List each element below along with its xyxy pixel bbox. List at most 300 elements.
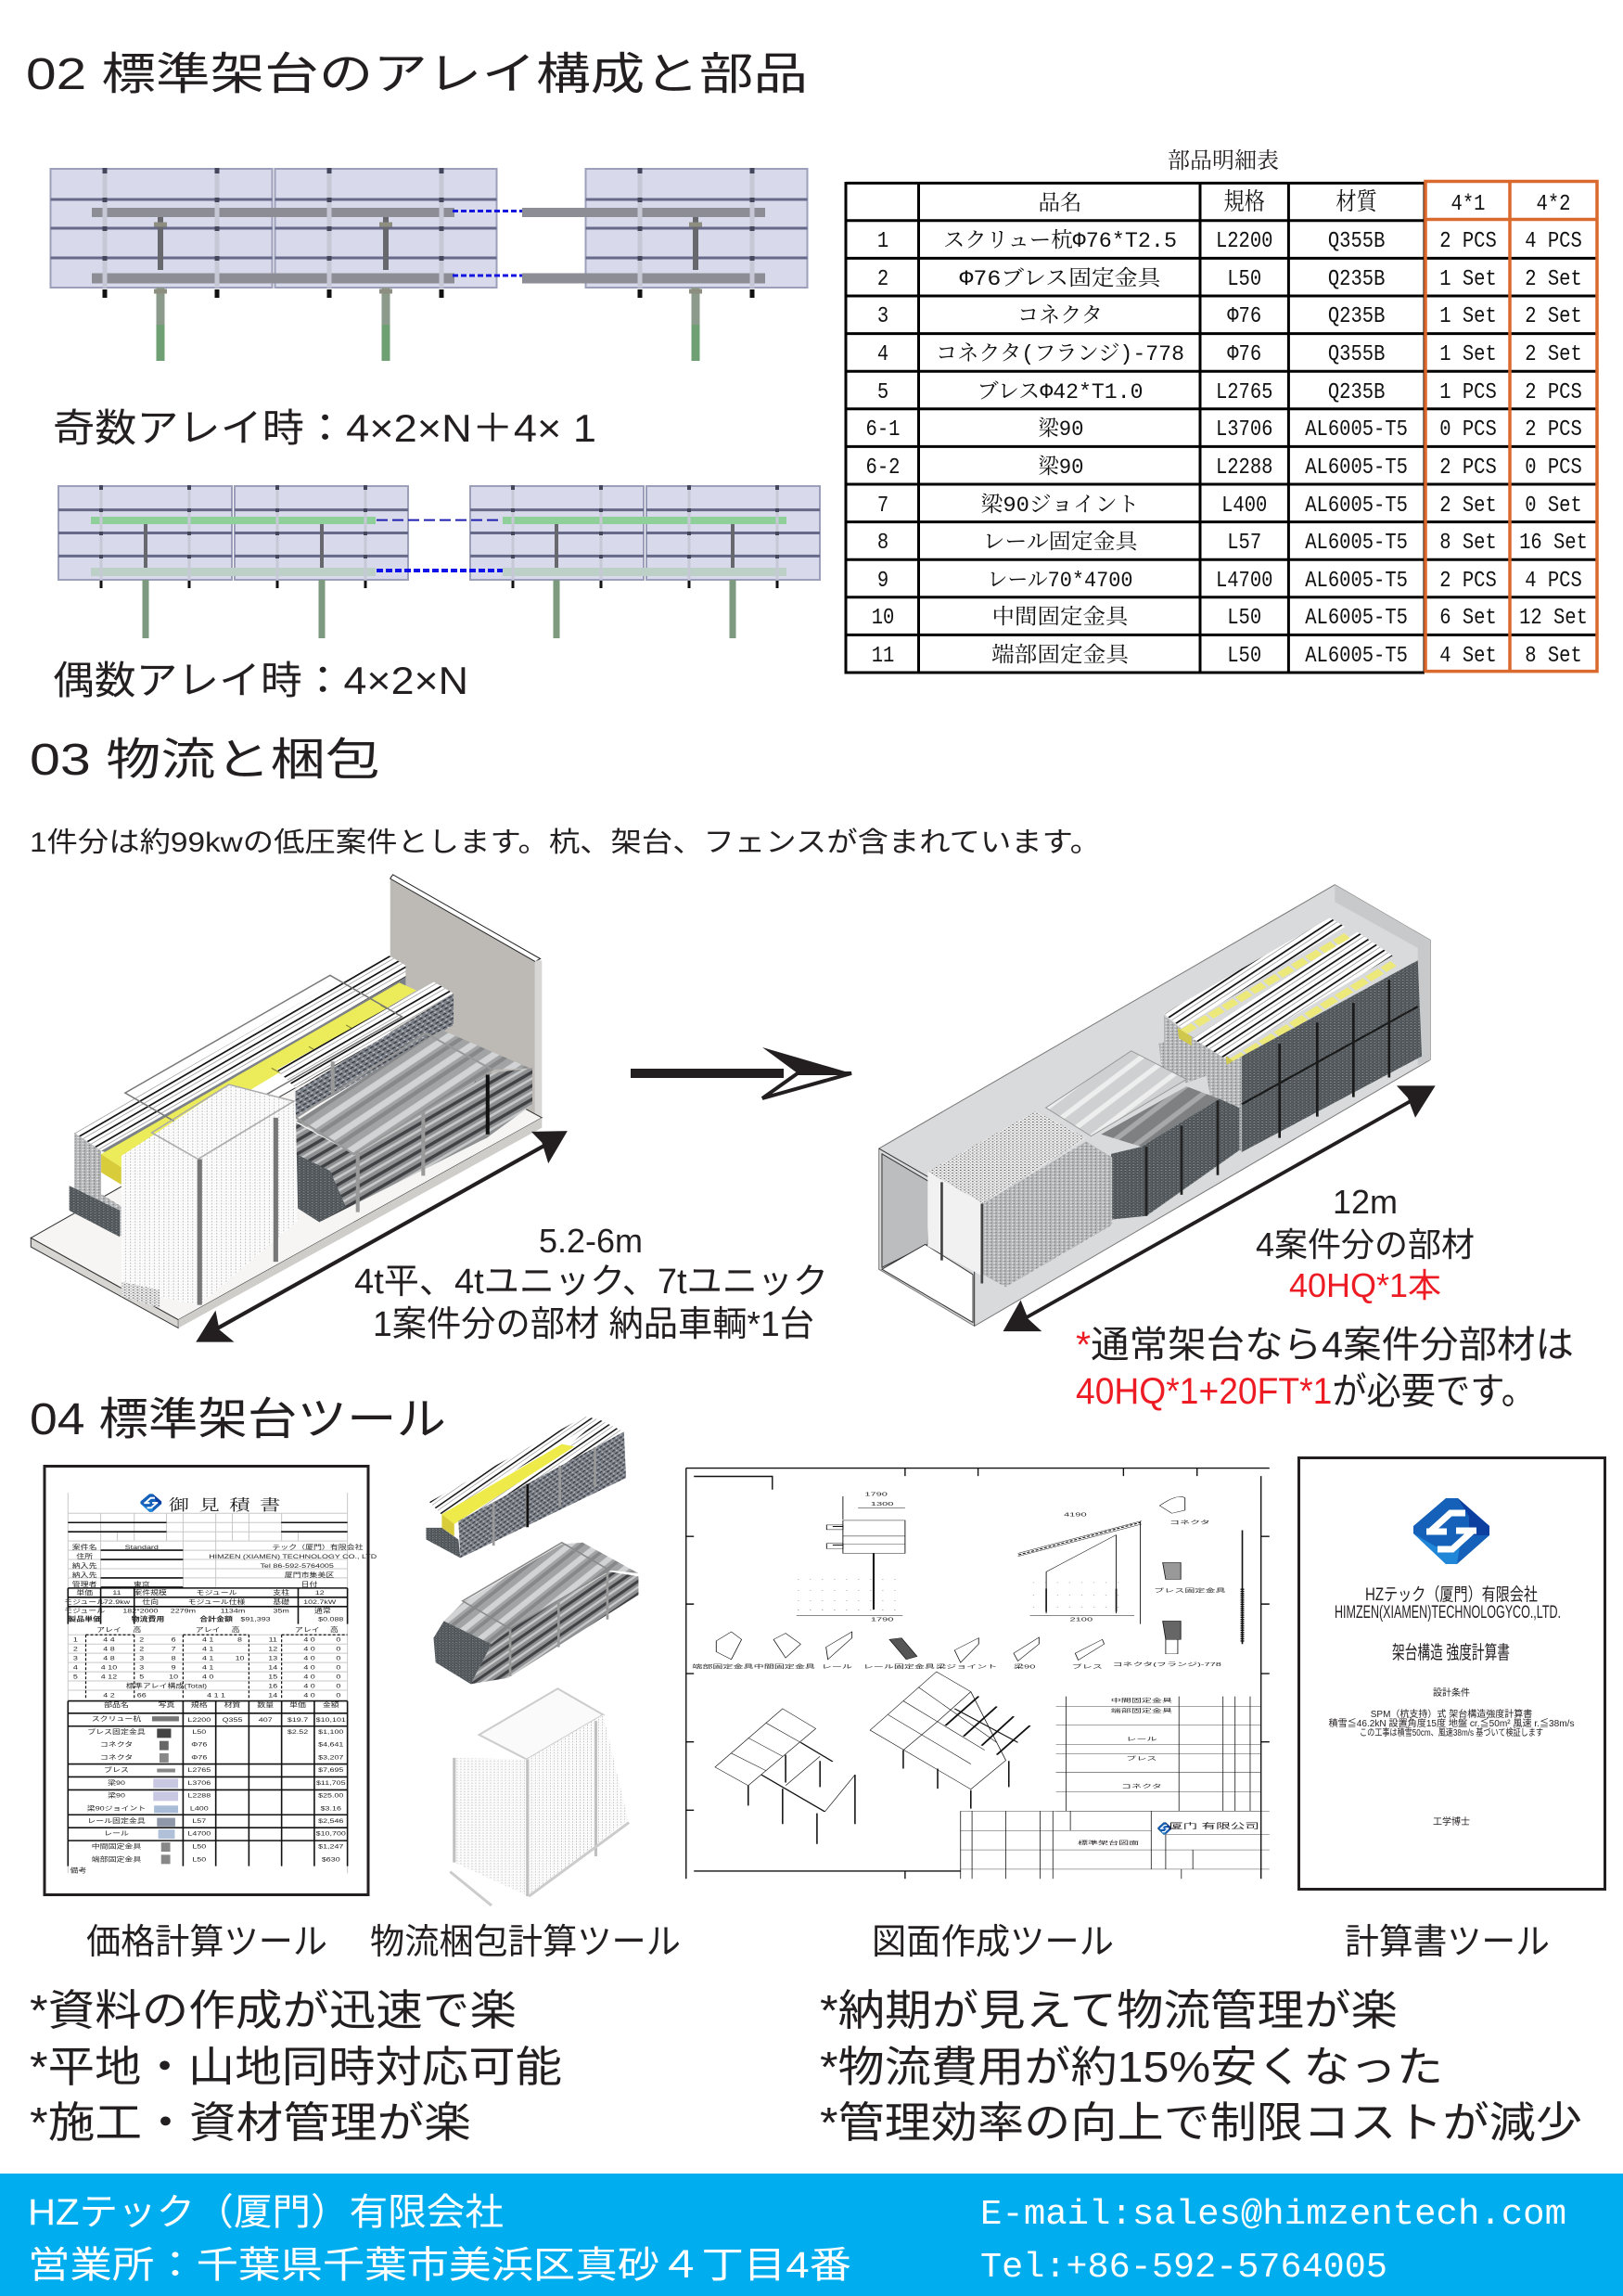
column: 4*1: 2 PCS xyxy=(1439,568,1497,594)
column: 4*2 xyxy=(1519,191,1588,669)
quote text: Φ76 xyxy=(191,1754,208,1761)
part labels: 端部固定金具 xyxy=(692,1663,754,1670)
column: 4*2: 8 Set xyxy=(1525,643,1582,669)
quote text: 4 10 xyxy=(101,1664,118,1671)
report title: 架台構造 強度計算書 xyxy=(1392,1642,1510,1663)
benefits: left: *資料の作成が迅速で楽 xyxy=(30,1986,517,2034)
footer band xyxy=(0,2174,1623,2296)
column: spec xyxy=(1216,188,1272,669)
column: material: Q235B xyxy=(1328,303,1385,329)
column: 4*1: 4 Set xyxy=(1439,643,1497,669)
column: name: Φ76ブレス固定金具 xyxy=(959,266,1162,291)
column: material: Q235B xyxy=(1328,266,1385,292)
column: 4*1: 1 Set xyxy=(1439,266,1497,292)
quote text: L50 xyxy=(192,1843,207,1850)
quote text: 標準アレイ構成(Total) xyxy=(126,1682,208,1689)
column: name: コネクタ xyxy=(1017,304,1103,328)
quote text: 備考 xyxy=(70,1866,87,1874)
column: material: AL6005-T5 xyxy=(1305,643,1408,669)
quote text: 端部固定金具 xyxy=(92,1855,141,1863)
quote text: 厦門市集美区 xyxy=(285,1571,334,1579)
column: name: コネクタ(フランジ)-778 xyxy=(936,342,1184,366)
column: number: 11 xyxy=(872,643,894,669)
title block xyxy=(961,1811,1270,1879)
truck bed and wall xyxy=(31,875,542,1328)
column: name: 梁90 xyxy=(1039,417,1083,442)
column: 4*1 xyxy=(1439,191,1497,669)
column: number: 9 xyxy=(877,568,888,594)
benefits: right: *物流費用が約15%安くなった xyxy=(820,2043,1443,2091)
quote text: 4 0 xyxy=(303,1655,315,1661)
column: 4*2: 2 PCS xyxy=(1525,417,1582,443)
quote text: $91,393 xyxy=(240,1616,271,1623)
illustration: container load xyxy=(879,885,1436,1331)
column: name: 梁90 xyxy=(1039,455,1083,480)
column: 4*2: 2 Set xyxy=(1525,341,1582,367)
report details: 積雪≦46.2kN 設置角度15度 地盤 cr.≦50m² 風速 r.≦38m/s xyxy=(1328,1717,1575,1729)
document: calculation report xyxy=(1298,1458,1604,1889)
piles xyxy=(146,524,733,638)
quote text: 2279m xyxy=(171,1607,197,1614)
quote text: 11 xyxy=(269,1636,277,1643)
report details: SPM（杭支持）式 架台構造強度計算書 xyxy=(1371,1708,1532,1720)
quote text: 合計金額 xyxy=(199,1615,233,1623)
quote text: 0 xyxy=(336,1682,341,1689)
document: drawing sheet xyxy=(686,1469,1270,1879)
column: 4*1: 1 Set xyxy=(1439,303,1497,329)
part labels: 梁ジョイント xyxy=(936,1663,997,1670)
quote text: 0 xyxy=(336,1673,341,1680)
part labels: ブレス固定金具 xyxy=(1154,1587,1226,1594)
quote text: L4700 xyxy=(187,1830,211,1837)
column: material xyxy=(1305,188,1408,669)
column: spec: L50 xyxy=(1227,266,1261,292)
quote text: 仕向 xyxy=(142,1597,159,1606)
quote text: 3 xyxy=(139,1655,145,1661)
column: name: スクリュー杭Φ76*T2.5 xyxy=(943,228,1177,253)
column: name: ブレスΦ42*T1.0 xyxy=(978,380,1143,404)
container caption: 4案件分の部材 xyxy=(1256,1225,1475,1263)
side elevation view: 4190 xyxy=(1064,1511,1087,1518)
column: 4*1: 2 PCS xyxy=(1439,455,1497,481)
column: spec: L50 xyxy=(1227,605,1261,631)
quote text: 納入先 xyxy=(72,1561,97,1570)
bill of materials block: ブレス xyxy=(1126,1755,1157,1762)
quote text: 4 xyxy=(73,1664,79,1671)
quote text: 4 1 xyxy=(202,1636,213,1643)
quote text: モジュール仕様 xyxy=(188,1597,246,1606)
arrow: length xyxy=(196,1131,568,1342)
quote text: 13 xyxy=(268,1655,278,1661)
label: odd array formula: 奇数アレイ時：4×2×N＋4× 1 xyxy=(53,406,596,450)
quote text: 梁90 xyxy=(108,1779,126,1786)
column: number: 6-1 xyxy=(866,417,900,443)
part labels: コネクタ(フランジ)-778 xyxy=(1113,1661,1221,1667)
quote grid xyxy=(68,1493,348,1873)
side elevation view: 2100 xyxy=(1070,1616,1093,1623)
mesh bundle xyxy=(121,1084,298,1308)
quote text: 4 0 xyxy=(303,1691,315,1699)
quote text: 案件規模 xyxy=(134,1588,167,1597)
report details: 設計条件 xyxy=(1433,1687,1470,1699)
quote header: 御見積書 xyxy=(169,1493,280,1515)
benefits: right: *管理効率の向上で制限コストが減少 xyxy=(820,2098,1582,2147)
pack: piles xyxy=(433,1543,638,1684)
quote text: 14 xyxy=(268,1664,278,1671)
quote text: 0 xyxy=(336,1646,341,1652)
column: number: 10 xyxy=(872,605,894,631)
quote text: L400 xyxy=(190,1804,209,1812)
column: number: 2 xyxy=(877,266,888,292)
parts table xyxy=(846,182,1597,673)
sheet frame xyxy=(686,1469,1270,1879)
document: quotation xyxy=(45,1466,377,1894)
quote text: 66 xyxy=(137,1691,147,1699)
quote text: アレイ xyxy=(96,1626,121,1634)
quote text: L2200 xyxy=(187,1716,211,1723)
truck caption: 1案件分の部材 納品車輌*1台 xyxy=(373,1305,814,1344)
telephone: Tel:+86-592-5764005 xyxy=(980,2248,1387,2288)
column: number: 1 xyxy=(877,228,888,254)
column: spec: L2288 xyxy=(1216,455,1272,481)
quote text: $11,705 xyxy=(316,1779,346,1786)
quote text: $25.00 xyxy=(318,1791,344,1799)
quote text: 72.9kw xyxy=(104,1598,130,1606)
note: container comparison: *通常架台なら4案件分部材は xyxy=(1076,1325,1574,1366)
diagram: even array xyxy=(58,485,820,638)
column: 4*1: 1 Set xyxy=(1439,341,1497,367)
quote text: 2 xyxy=(139,1636,144,1643)
column: 4*2: 4 PCS xyxy=(1525,568,1582,594)
diagram: odd array xyxy=(50,168,807,361)
table caption: 部品明細表 xyxy=(1168,142,1279,174)
quote text: 案件名 xyxy=(72,1543,97,1551)
column: 4*2: 0 Set xyxy=(1525,493,1582,519)
column: spec: L50 xyxy=(1227,643,1261,669)
benefits: left: *施工・資材管理が楽 xyxy=(30,2098,471,2147)
column: spec: 規格 xyxy=(1223,188,1265,218)
quote text: 高 xyxy=(232,1625,240,1634)
tool labels: 計算書ツール xyxy=(1345,1923,1550,1962)
tool labels xyxy=(86,1923,1550,1962)
tool labels: 物流梱包計算ツール xyxy=(370,1923,681,1962)
front elevation view xyxy=(797,1491,905,1623)
quote text: $7,695 xyxy=(318,1766,344,1774)
part labels: 中間固定金具 xyxy=(754,1663,815,1670)
quote text: 4 0 xyxy=(303,1682,315,1689)
quote text: 日付 xyxy=(301,1580,318,1588)
quote text: アレイ xyxy=(196,1626,221,1634)
side elevation view xyxy=(1018,1511,1142,1624)
bill of materials block: 端部固定金具 xyxy=(1111,1707,1172,1713)
part labels: レール固定金具 xyxy=(863,1663,935,1670)
quote text: モジュール xyxy=(197,1589,237,1597)
quote text: 4 0 xyxy=(303,1636,315,1643)
quote text: $4,641 xyxy=(318,1740,343,1748)
tool labels: 価格計算ツール xyxy=(86,1923,327,1962)
quote text: 407 xyxy=(259,1716,273,1723)
column: 4*2: 0 PCS xyxy=(1525,455,1582,481)
pile bundle xyxy=(296,1030,532,1222)
quote text: $19.7 xyxy=(288,1716,308,1723)
quote text: 東京 xyxy=(134,1580,150,1588)
quote text: 16 xyxy=(268,1682,278,1689)
quote text: 8 xyxy=(172,1655,176,1661)
report details xyxy=(1328,1687,1575,1828)
quote text: 8 xyxy=(237,1636,243,1643)
quote text: レール xyxy=(104,1830,129,1837)
column: number: 7 xyxy=(877,493,888,519)
quote text: 数量 xyxy=(257,1700,274,1709)
quote text xyxy=(64,1543,377,1874)
orange highlight xyxy=(1425,182,1597,672)
company name: HZテック（厦門）有限会社 xyxy=(1365,1584,1538,1605)
quote text: L57 xyxy=(192,1817,206,1825)
benefits: left: *平地・山地同時対応可能 xyxy=(30,2043,562,2091)
quote text: $630 xyxy=(322,1855,340,1863)
quote text: コネクタ xyxy=(100,1754,133,1761)
column: 4*2: 2 Set xyxy=(1525,303,1582,329)
truck caption: 4t平、4tユニック、7tユニック xyxy=(354,1263,828,1302)
container caption: 40HQ*1本 xyxy=(1289,1266,1441,1304)
bill of materials block: コネクタ xyxy=(1121,1783,1162,1789)
email: E-mail:sales@himzentech.com xyxy=(980,2195,1566,2235)
quote text: 材質 xyxy=(224,1700,241,1709)
column: number: 6-2 xyxy=(866,455,900,481)
quote text: $1,247 xyxy=(318,1843,343,1850)
column: spec: L2200 xyxy=(1216,228,1272,254)
quote text: 管理者 xyxy=(72,1580,97,1588)
quote text: 4 8 xyxy=(103,1646,115,1652)
quote text: 支柱 xyxy=(273,1588,289,1597)
column: material: AL6005-T5 xyxy=(1305,530,1408,556)
part labels: コネクタ xyxy=(1169,1520,1210,1525)
quote text: 5 xyxy=(139,1673,145,1680)
quote text: 高 xyxy=(133,1625,141,1634)
quote text: 4 0 xyxy=(202,1673,214,1680)
column: name: レール固定金具 xyxy=(983,530,1139,555)
report details: 工学博士 xyxy=(1433,1815,1470,1828)
column: material: 材質 xyxy=(1335,188,1378,218)
connector dashes xyxy=(453,212,522,276)
column: number: 8 xyxy=(877,530,888,556)
quote text: $2,546 xyxy=(318,1817,344,1825)
quote text: 納入先 xyxy=(72,1571,97,1579)
quote text: 基礎 xyxy=(273,1597,289,1606)
quote text: 製品単価 xyxy=(68,1615,101,1623)
quote text: 0 xyxy=(336,1655,341,1661)
column: 4*2: 2 PCS xyxy=(1525,379,1582,405)
part labels: 梁90 xyxy=(1014,1663,1036,1670)
quote text: レール固定金具 xyxy=(87,1816,146,1825)
benefits: right xyxy=(820,1986,1582,2147)
quote text: 金額 xyxy=(323,1700,339,1709)
quote text: Tel 86-592-5764005 xyxy=(260,1562,335,1570)
column: 4*1: 0 PCS xyxy=(1439,417,1497,443)
quote text: 12 xyxy=(268,1646,277,1652)
quote text: Standard xyxy=(125,1544,159,1551)
bill of materials block xyxy=(1056,1697,1261,1811)
quote text: テック（厦門）有限会社 xyxy=(272,1543,364,1551)
part labels: レール xyxy=(822,1664,852,1670)
quote text: 3 xyxy=(73,1655,79,1661)
bill of materials block: レール xyxy=(1126,1737,1157,1742)
connector dashes xyxy=(377,519,503,521)
column: spec: L3706 xyxy=(1216,417,1272,443)
quote text: スクリュー杭 xyxy=(92,1714,141,1723)
part labels: ブレス xyxy=(1072,1663,1103,1670)
quote text: 0 xyxy=(336,1664,341,1671)
quote text: $3,207 xyxy=(318,1754,343,1761)
quote text: 1 xyxy=(73,1636,78,1643)
column: 4*1: 4*1 xyxy=(1451,191,1485,217)
column: name: 梁90ジョイント xyxy=(981,493,1139,518)
column: 4*2: 2 Set xyxy=(1525,266,1582,292)
quote text: 4 0 xyxy=(303,1646,315,1652)
front elevation view: 1790 xyxy=(864,1491,888,1497)
column: name: 品名 xyxy=(1039,191,1081,216)
quote text: 4 1 1 xyxy=(207,1691,225,1699)
quote text: L3706 xyxy=(187,1779,211,1786)
quote text: 15 xyxy=(268,1673,278,1680)
quote text: 4 4 xyxy=(103,1636,115,1643)
quote text: 4 2 xyxy=(103,1691,115,1699)
quote text: 単価 xyxy=(289,1700,306,1709)
quote text: 住所 xyxy=(76,1552,93,1560)
note: container comparison: 40HQ*1+20FT*1が必要です。 xyxy=(1076,1371,1536,1412)
bill of materials block: 中間固定金具 xyxy=(1111,1697,1172,1704)
column: material: AL6005-T5 xyxy=(1305,568,1408,594)
column: spec: L2765 xyxy=(1216,379,1272,405)
beam rails xyxy=(92,208,765,284)
front elevation view: 1790 xyxy=(871,1616,894,1623)
company: HZテック（厦門）有限会社 xyxy=(28,2192,504,2233)
column: 4*1: 2 Set xyxy=(1439,493,1497,519)
quote text: Q355 xyxy=(223,1716,243,1723)
office address: 営業所：千葉県千葉市美浜区真砂４丁目4番 xyxy=(28,2245,851,2286)
quote text: 5 xyxy=(73,1673,79,1680)
beam rails xyxy=(91,517,786,576)
quote text: 182*2000 xyxy=(122,1607,159,1614)
quote text: 10 xyxy=(169,1673,179,1680)
quote text: モジュール xyxy=(64,1598,105,1606)
quote text: 7 xyxy=(172,1646,176,1652)
quote text: L2288 xyxy=(187,1791,211,1799)
intro text: 1件分は約99kwの低圧案件とします。杭、架台、フェンスが含まれています。 xyxy=(30,827,1101,858)
isometric array: left xyxy=(715,1709,855,1844)
quote text: ブレス固定金具 xyxy=(87,1727,146,1736)
quote text: 2 xyxy=(139,1646,144,1652)
quote text: 0 xyxy=(336,1691,341,1699)
quote text: 写真 xyxy=(159,1700,175,1709)
quote text: L2765 xyxy=(187,1766,211,1774)
quote text: ブレス xyxy=(104,1765,129,1774)
quote text: 規格 xyxy=(191,1700,208,1709)
tool labels: 図面作成ツール xyxy=(872,1923,1114,1962)
part labels xyxy=(692,1520,1226,1670)
column: name: レール70*4700 xyxy=(987,569,1133,593)
aluminium stack xyxy=(70,954,454,1237)
column: material: AL6005-T5 xyxy=(1305,493,1408,519)
mesh bundles xyxy=(927,1111,1112,1287)
column: number xyxy=(866,228,900,669)
quote text: $2.52 xyxy=(288,1728,308,1736)
arrow: length xyxy=(1003,1085,1436,1331)
quote text: $0.088 xyxy=(318,1616,344,1623)
quote text: L50 xyxy=(192,1728,207,1736)
column: 4*1: 2 PCS xyxy=(1439,228,1497,254)
column: name: 端部固定金具 xyxy=(991,643,1130,668)
quote text: 4 1 xyxy=(202,1664,213,1671)
column: name xyxy=(936,191,1184,668)
quote text: 単価 xyxy=(76,1588,93,1597)
column: number: 4 xyxy=(877,341,888,367)
quote part pictures xyxy=(152,1716,179,1864)
column: 4*1: 6 Set xyxy=(1439,605,1497,631)
column: 4*1: 1 PCS xyxy=(1439,379,1497,405)
quote text: 4 1 xyxy=(202,1646,213,1652)
quote text: 102.7kW xyxy=(303,1598,337,1606)
label: even array formula: 偶数アレイ時：4×2×N xyxy=(53,659,468,702)
column: 4*2: 12 Set xyxy=(1519,605,1588,631)
section heading: 04: 04 標準架台ツール xyxy=(30,1395,446,1444)
quote text: モジュール xyxy=(64,1607,105,1614)
quote text: 9 xyxy=(172,1664,176,1671)
benefits: left xyxy=(30,1986,562,2147)
column: number: 5 xyxy=(877,379,888,405)
column: material: AL6005-T5 xyxy=(1305,417,1408,443)
quote text: 中間固定金具 xyxy=(92,1842,141,1850)
pile bundles xyxy=(1046,1051,1239,1220)
quote text: $10,101 xyxy=(316,1716,346,1723)
truck caption: 5.2-6m xyxy=(539,1222,643,1260)
container caption: 12m xyxy=(1333,1183,1398,1221)
report details: この工事は積雪50cm、風速38m/s 基づいて検証します xyxy=(1360,1726,1543,1738)
quote text: アレイ xyxy=(295,1626,320,1634)
column: material: Q355B xyxy=(1328,228,1385,254)
isometric array: right xyxy=(870,1672,1030,1809)
note: container comparison xyxy=(1076,1325,1574,1412)
quote text: 35m xyxy=(274,1607,289,1614)
quote text: L50 xyxy=(192,1855,207,1863)
pack: mesh xyxy=(450,1688,629,1905)
arrow: truck to container xyxy=(631,1047,851,1098)
benefits: right: *納期が見えて物流管理が楽 xyxy=(820,1986,1398,2034)
column: spec: Φ76 xyxy=(1227,341,1261,367)
title block: 標準架台図面 xyxy=(1078,1840,1140,1846)
part sketches xyxy=(716,1496,1243,1662)
quote text: 物流費用 xyxy=(132,1615,164,1623)
illustrations: logistics packs xyxy=(426,1417,638,1905)
column: 4*2: 16 Set xyxy=(1519,530,1588,556)
column: material: AL6005-T5 xyxy=(1305,605,1408,631)
quote text: 梁90 xyxy=(108,1791,126,1799)
column: 4*1: 8 Set xyxy=(1439,530,1497,556)
company logo xyxy=(1413,1498,1489,1564)
quote text: 6 xyxy=(172,1636,176,1643)
quote text: 14 xyxy=(268,1691,278,1699)
pack: aluminium xyxy=(426,1417,626,1558)
quote text: $10,700 xyxy=(316,1830,347,1837)
column: spec: L57 xyxy=(1227,530,1261,556)
quote text: 梁90ジョイント xyxy=(87,1804,146,1812)
column: material: Q355B xyxy=(1328,341,1385,367)
quote text: 通常 xyxy=(314,1607,331,1614)
quote text: 12 xyxy=(315,1589,325,1597)
quote text: 高 xyxy=(330,1625,339,1634)
container caption xyxy=(1256,1183,1475,1304)
front elevation view: 1300 xyxy=(871,1501,894,1507)
